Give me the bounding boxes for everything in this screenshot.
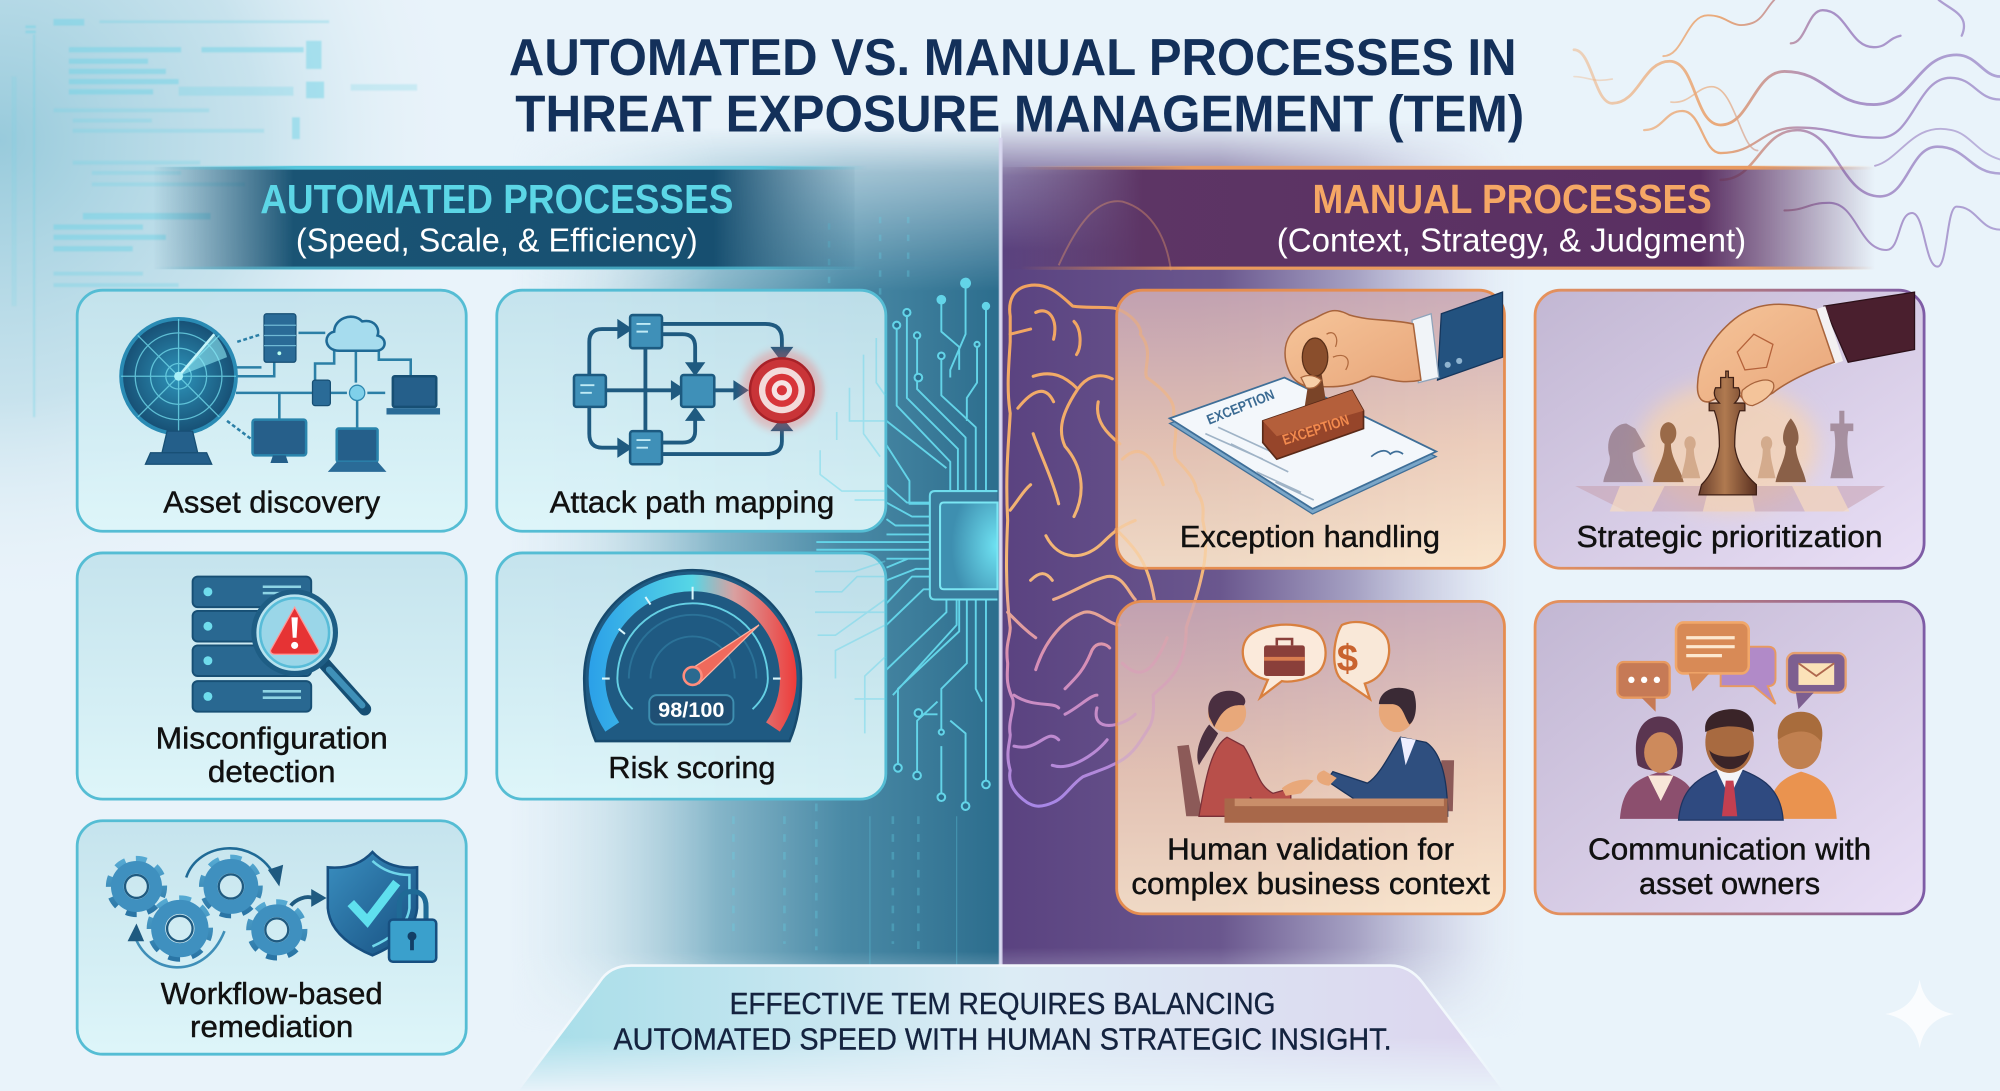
card: asset discovery	[77, 290, 466, 531]
icon: gears and shield with lock	[111, 848, 436, 967]
card: workflow-based remediation	[77, 821, 466, 1054]
card: communication with asset owners	[1535, 601, 1924, 914]
binary columns	[733, 217, 957, 969]
code background, top left	[11, 19, 417, 417]
bottom banner: EFFECTIVE TEM REQUIRES BALANCING	[730, 987, 1276, 1021]
card: workflow-based remediation: remediation	[190, 1010, 353, 1044]
icon: risk gauge: 98/100	[658, 697, 724, 722]
card: attack path mapping	[497, 290, 886, 531]
header: automated processes: AUTOMATED PROCESSES	[260, 176, 733, 222]
bottom banner	[517, 966, 1505, 1091]
header: manual processes: MANUAL PROCESSES	[1312, 176, 1712, 222]
card: strategic prioritization	[1535, 290, 1924, 568]
card: attack path mapping: Attack path mapping	[550, 486, 834, 520]
card: human validation	[1115, 600, 1506, 916]
title	[509, 29, 1524, 143]
brain outline	[1007, 285, 1206, 806]
icon: servers with magnifier	[193, 577, 365, 712]
icon: team with message bubbles	[1617, 622, 1846, 820]
card: risk scoring: Risk scoring	[608, 751, 776, 785]
icon: stamp on document: EXCEPTION	[1281, 412, 1351, 449]
title: THREAT EXPOSURE MANAGEMENT (TEM)	[515, 85, 1524, 143]
panel: manual processes	[1115, 288, 1926, 916]
card: asset discovery: Asset discovery	[163, 486, 381, 520]
card: human validation: Human validation for	[1167, 833, 1454, 867]
card: communication with asset owners: Communication with	[1588, 833, 1871, 867]
icon: stamp on document: EXCEPTION	[1204, 386, 1277, 428]
icon: stamp on document	[1170, 292, 1503, 514]
bottom banner: AUTOMATED SPEED WITH HUMAN STRATEGIC INSIGHT.	[614, 1023, 1392, 1057]
icon: sparkle	[1885, 980, 1954, 1048]
card: misconfiguration detection: Misconfiguration	[156, 722, 388, 756]
header: automated processes: (Speed, Scale, & Efficiency)	[296, 222, 698, 259]
header: manual processes: (Context, Strategy, & Judgment)	[1277, 222, 1746, 259]
icon: attack paths	[574, 315, 823, 464]
card: misconfiguration detection	[77, 553, 466, 799]
card: strategic prioritization: Strategic prioritization	[1577, 520, 1883, 554]
card: exception handling	[1115, 288, 1506, 570]
header: manual processes	[1003, 166, 1875, 270]
card: risk scoring	[497, 553, 886, 799]
card: workflow-based remediation: Workflow-based	[161, 977, 383, 1011]
icon: chess pieces	[1575, 292, 1915, 511]
card: human validation: complex business context	[1131, 867, 1490, 901]
title: AUTOMATED VS. MANUAL PROCESSES IN	[509, 29, 1517, 87]
card: misconfiguration detection: detection	[208, 755, 335, 789]
header: automated processes	[153, 166, 867, 270]
chip	[930, 491, 997, 599]
icon: business discussion	[1177, 622, 1454, 823]
circuit board traces	[816, 279, 990, 810]
panel: automated processes	[77, 290, 886, 1054]
card: exception handling: Exception handling	[1180, 520, 1440, 554]
icon: risk gauge	[584, 570, 801, 741]
icon: business discussion: $	[1337, 637, 1358, 680]
card: communication with asset owners: asset owners	[1639, 867, 1820, 901]
page background	[0, 0, 1488, 1012]
icon: radar and network	[121, 314, 440, 472]
decorative waves, top right	[1574, 0, 2000, 267]
